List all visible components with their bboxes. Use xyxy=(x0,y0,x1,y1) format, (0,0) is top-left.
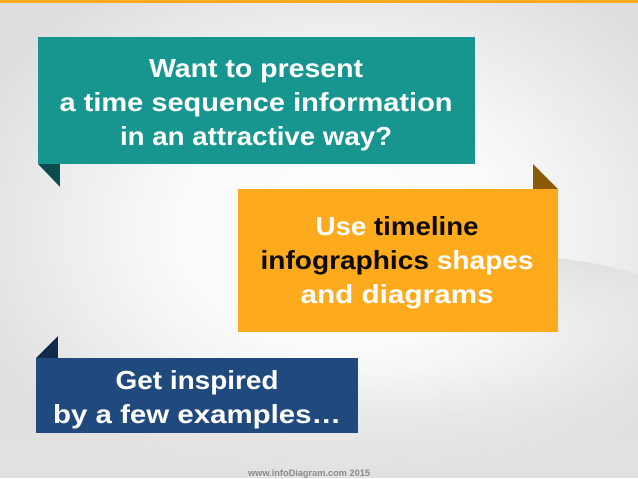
blue banner text: Get inspired xyxy=(116,365,278,395)
blue banner text xyxy=(53,365,341,429)
panel: orange timeline banner xyxy=(238,164,558,332)
teal banner text xyxy=(60,53,452,151)
orange banner body xyxy=(238,189,558,332)
blue banner fold xyxy=(36,336,58,358)
blue banner body xyxy=(36,358,358,433)
orange banner text: and diagrams xyxy=(300,279,494,309)
teal banner text: Want to present xyxy=(149,53,363,83)
footer credit: www.infoDiagram.com 2015 xyxy=(247,468,371,479)
panel: blue examples banner xyxy=(36,336,358,433)
teal banner body xyxy=(38,37,475,164)
teal banner fold xyxy=(38,164,60,187)
orange banner text: infographics shapes xyxy=(260,245,534,275)
top accent bar xyxy=(0,0,638,3)
orange banner fold xyxy=(533,164,558,189)
panel: teal question banner xyxy=(38,37,475,187)
blue banner text: by a few examples… xyxy=(53,399,341,429)
orange banner text xyxy=(260,211,534,309)
teal banner text: in an attractive way? xyxy=(120,121,392,151)
orange banner text: Use timeline xyxy=(316,211,478,241)
teal banner text: a time sequence information xyxy=(60,87,452,117)
